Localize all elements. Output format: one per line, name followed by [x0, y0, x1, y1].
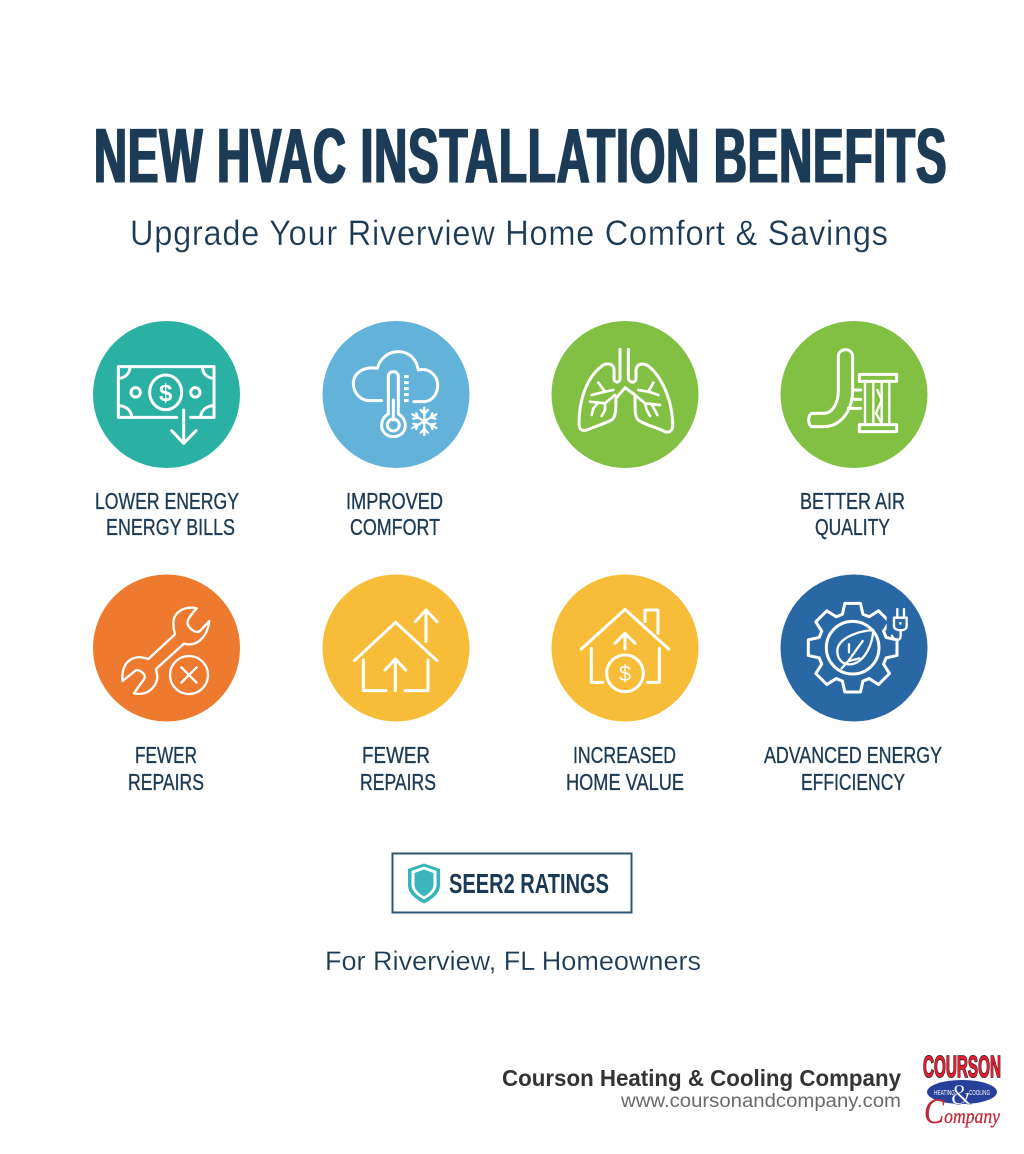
- badge text: SEER2 RATINGS: [449, 868, 609, 899]
- label: fewer repairs: REPAIRS: [128, 769, 204, 795]
- company logo: HEATING: [934, 1090, 955, 1097]
- label: improved comfort: COMFORT: [350, 514, 440, 540]
- title: NEW HVAC INSTALLATION BENEFITS: [94, 112, 947, 200]
- benefit: lower energy bills: [93, 321, 240, 540]
- label: fewer repairs: FEWER: [362, 742, 430, 768]
- label: lower energy bills: [95, 488, 239, 540]
- label: advanced energy efficiency: EFFICIENCY: [801, 769, 905, 795]
- badge: SEER2 ratings: [392, 854, 632, 912]
- benefit: improved comfort: [322, 321, 470, 540]
- company logo: [923, 1049, 1001, 1131]
- label: better air quality: [800, 488, 905, 540]
- label: better air quality: BETTER AIR: [800, 488, 905, 514]
- label: fewer repairs: REPAIRS: [360, 769, 436, 795]
- icon: money bill with down arrow: [93, 321, 240, 468]
- company logo: COOLING: [969, 1090, 990, 1097]
- label: increased home value: INCREASED: [573, 742, 676, 768]
- label: advanced energy efficiency: [764, 742, 942, 795]
- subtitle: Upgrade Your Riverview Home Comfort & Savings: [130, 214, 888, 253]
- icon: shield: [408, 864, 440, 904]
- label: advanced energy efficiency: ADVANCED ENERGY: [764, 742, 942, 768]
- label: lower energy bills: ENERGY BILLS: [106, 514, 235, 540]
- icon: gear with leaf and plug: [780, 574, 928, 722]
- company logo: &: [951, 1079, 972, 1111]
- label: improved comfort: [346, 488, 443, 540]
- benefit: increased home value: [552, 574, 698, 795]
- icon: cloud, thermometer and snowflake: [322, 321, 470, 468]
- benefit: advanced energy efficiency: [764, 574, 942, 795]
- label: increased home value: HOME VALUE: [566, 769, 684, 795]
- company logo: Company: [924, 1091, 1001, 1131]
- icon: house with up arrows: [322, 574, 470, 722]
- label: fewer repairs: [360, 742, 436, 795]
- icon: house with dollar coin: [552, 574, 698, 722]
- footer website: www.coursonandcompany.com: [620, 1091, 901, 1112]
- icon: duct and air filter: [780, 321, 928, 468]
- icon: lungs: [552, 321, 698, 468]
- label: better air quality: QUALITY: [815, 514, 890, 540]
- label: fewer repairs: FEWER: [135, 742, 197, 768]
- icon: money bill with down arrow: $: [159, 380, 172, 407]
- label: increased home value: [566, 742, 684, 795]
- footer company name: Courson Heating & Cooling Company: [502, 1065, 901, 1091]
- benefit: fewer repairs (house): [322, 574, 470, 795]
- icon: house with dollar coin: $: [619, 661, 631, 686]
- label: fewer repairs: [128, 742, 204, 795]
- benefit: fewer repairs (wrench): [93, 574, 240, 795]
- audience line: For Riverview, FL Homeowners: [325, 946, 701, 976]
- label: lower energy bills: LOWER ENERGY: [95, 488, 239, 514]
- icon: wrench with x mark: [93, 574, 240, 722]
- label: improved comfort: IMPROVED: [346, 488, 443, 514]
- benefit: better air quality: [780, 321, 928, 540]
